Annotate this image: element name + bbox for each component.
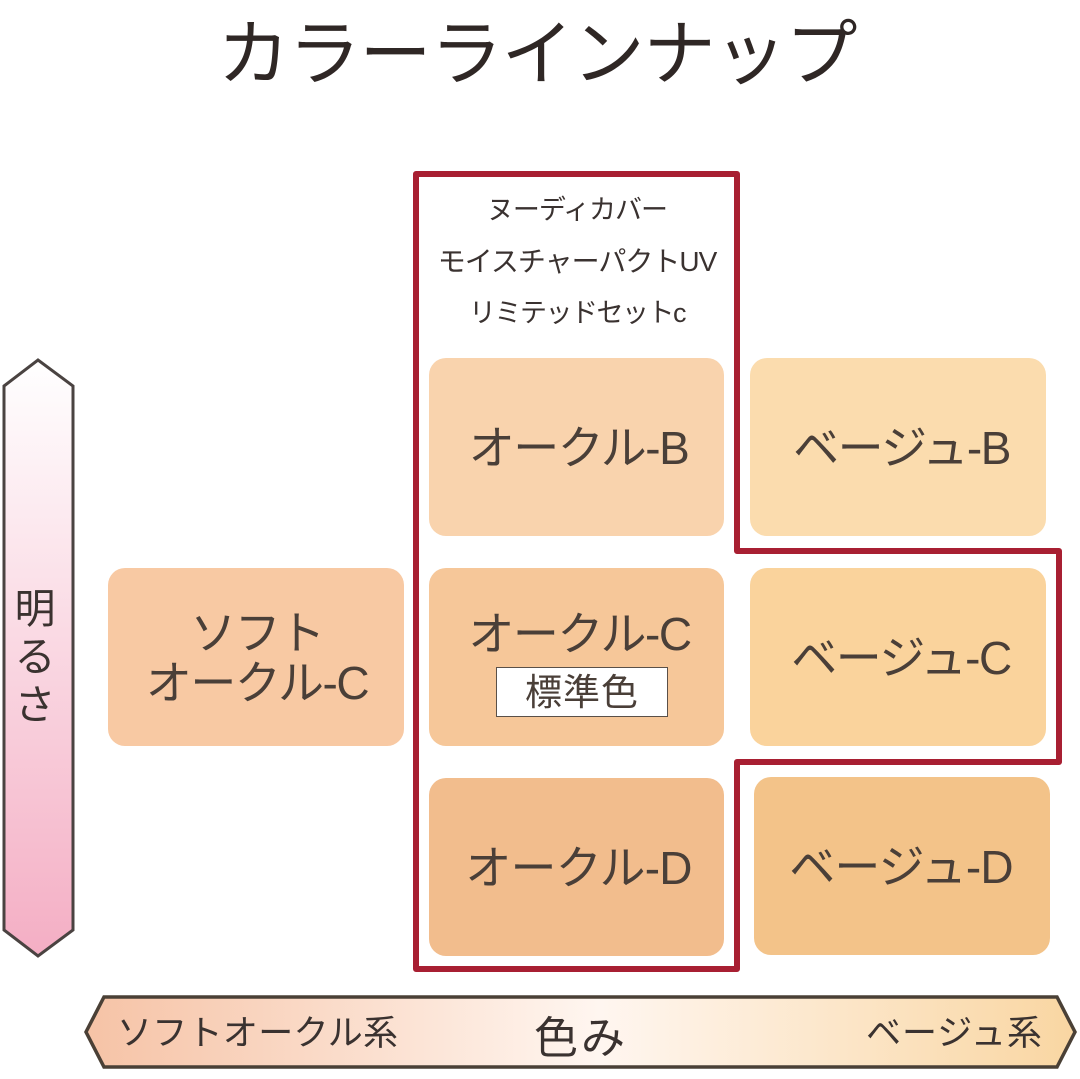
swatch: beige-B [750,358,1046,536]
swatch: beige-B: ベージュ-B [793,422,1010,474]
product name text [438,195,718,328]
swatch: ochre-C with standard colour tag [429,568,724,746]
hue label left: ソフトオークル系 [117,1014,398,1053]
swatch: soft ochre-C [108,568,404,746]
tag: standard colour: 標準色 [525,672,639,713]
swatch: ochre-D: オークル-D [465,842,692,894]
swatch: beige-D: ベージュ-D [789,840,1013,892]
product name text: リミテッドセットc [469,298,685,328]
swatch: beige-C: ベージュ-C [791,632,1011,684]
tag: standard colour [496,667,668,717]
swatch: soft ochre-C: オークル-C [146,656,368,708]
hue label right: ベージュ系 [866,1014,1043,1053]
swatch: ochre-C with standard colour tag: オークル-C [468,608,691,660]
brightness label: 明 [14,586,56,632]
product name text: ヌーディカバー [487,195,667,225]
hue arrow [84,995,1077,1069]
swatch: beige-C [750,568,1046,746]
hue label centre: 色み [534,1014,628,1063]
brightness arrow [2,358,74,958]
brightness label [14,586,56,728]
brightness label: る [14,634,56,680]
brightness label: さ [14,682,56,728]
product name text: モイスチャーパクトUV [438,246,716,277]
swatch: ochre-D [429,778,724,956]
title: カラーラインナップ [217,15,856,95]
swatch: beige-D [754,777,1050,955]
swatch: ochre-B [429,358,724,536]
swatch: ochre-B: オークル-B [469,422,688,474]
swatch: soft ochre-C: ソフト [190,606,324,658]
